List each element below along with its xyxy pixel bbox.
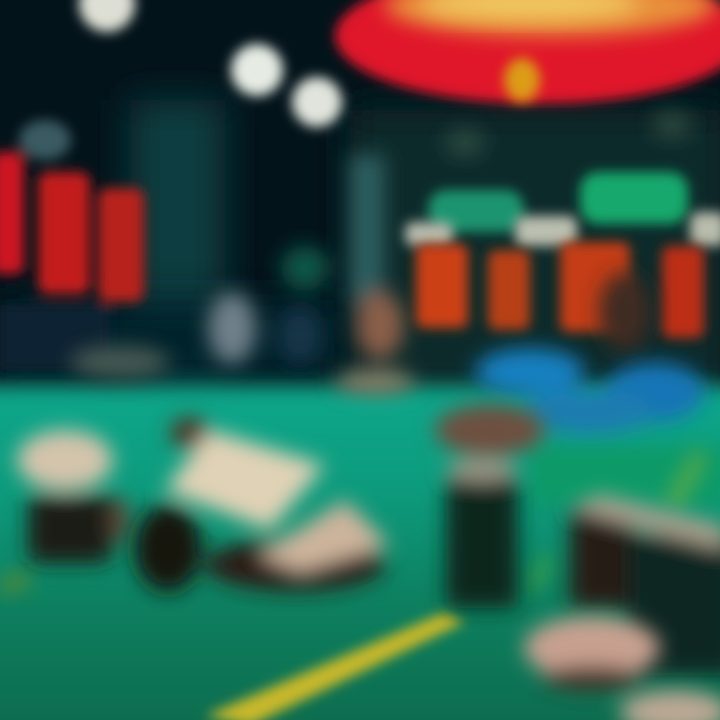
yellow table line [0,450,708,720]
centre background figures [70,111,692,394]
green felt table [0,385,720,720]
ceiling sign: red and yellow disc [335,0,720,104]
white ceiling lights [79,0,342,127]
chip stack: left [17,430,130,563]
chip stack: foreground [524,616,720,720]
poker chip stacks [17,404,720,720]
chip stack: right [570,494,720,675]
white band [405,212,720,246]
chip stack: centre tall [435,404,545,608]
green machine tops [428,172,688,232]
seated person in blue [475,272,705,434]
chip stack: centre pile [134,417,390,592]
right slot machines with green tops [405,172,720,338]
orange machine bodies [416,242,704,338]
left red slot machines [0,120,144,370]
